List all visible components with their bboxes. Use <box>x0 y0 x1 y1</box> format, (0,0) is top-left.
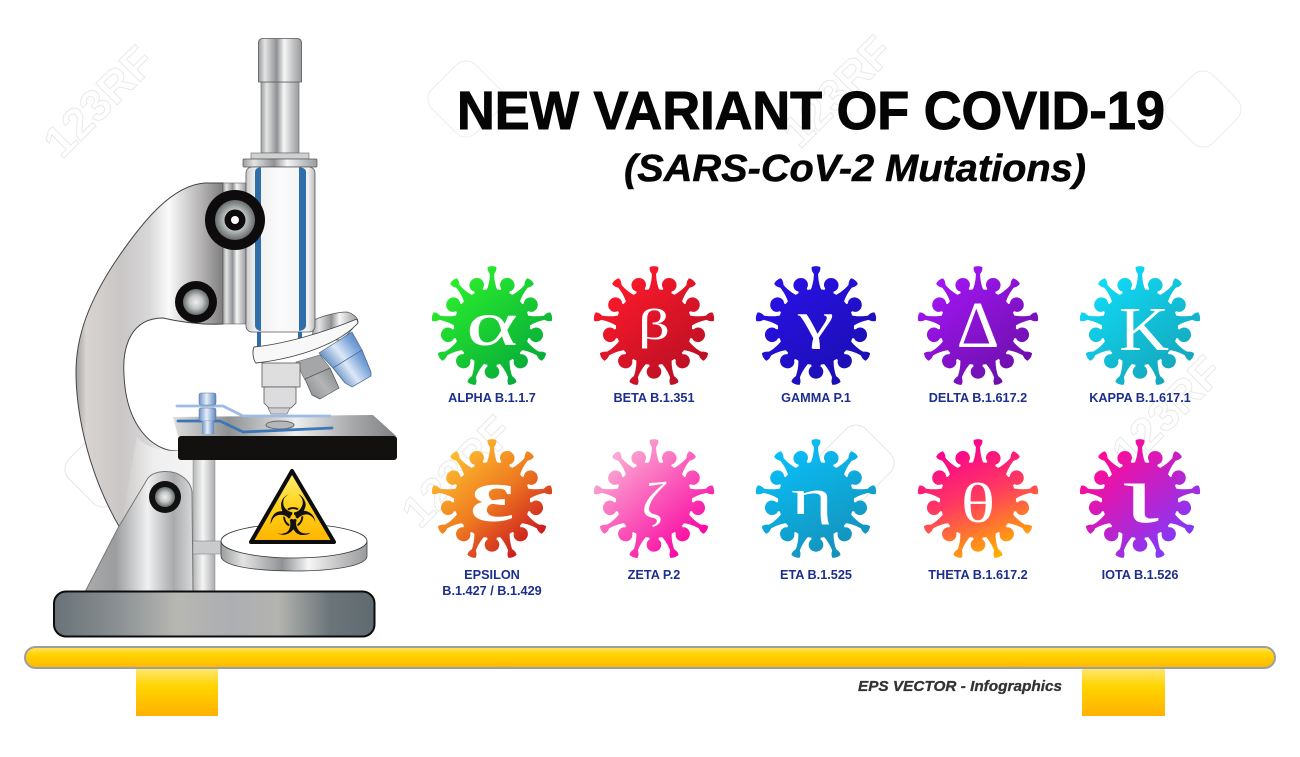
variant: zeta: ZETA P.2 <box>628 568 680 582</box>
flange <box>243 159 317 167</box>
variant: iota: ι <box>1121 448 1160 541</box>
main objective <box>262 363 300 414</box>
variant: epsilon: B.1.427 / B.1.429 <box>442 584 542 598</box>
variant: epsilon <box>432 439 552 596</box>
objective: grey <box>296 355 339 399</box>
shelf bar <box>25 647 1275 668</box>
lower tube stripes <box>257 330 302 350</box>
variant: kappa: Κ <box>1119 296 1169 364</box>
variant: gamma: GAMMA P.1 <box>781 391 851 405</box>
column <box>193 459 215 592</box>
variant: beta <box>594 266 714 402</box>
biohazard warning sign: ☣ <box>268 484 318 549</box>
specimen plate connector <box>193 541 223 554</box>
shelf foot right <box>1082 667 1165 716</box>
variant: iota <box>1080 439 1200 579</box>
base bracket <box>85 471 193 592</box>
variant: zeta: ζ <box>642 473 666 530</box>
variant: kappa: KAPPA B.1.617.1 <box>1089 391 1191 405</box>
text: 123RF <box>34 37 165 167</box>
variant: delta <box>918 266 1038 402</box>
shelf foot left <box>136 667 218 716</box>
arm post <box>223 183 246 324</box>
microscope base <box>54 592 374 636</box>
variant: delta: Δ <box>957 289 999 362</box>
body tube <box>246 167 315 332</box>
variant: beta: BETA B.1.351 <box>613 391 695 405</box>
text: 123RF <box>772 27 903 157</box>
variant: delta: DELTA B.1.617.2 <box>929 391 1027 405</box>
collar <box>251 153 309 159</box>
footer note: EPS VECTOR - Infographics <box>858 679 1062 695</box>
variant: theta: THETA B.1.617.2 <box>928 568 1028 582</box>
eyepiece cap <box>258 38 302 82</box>
eyepiece tube <box>261 82 299 153</box>
nosepiece band <box>253 319 358 363</box>
microscope <box>54 38 397 636</box>
variant: alpha <box>432 266 552 402</box>
stage clips <box>177 406 332 432</box>
text: 123RF <box>1102 347 1233 477</box>
stage block <box>178 436 397 460</box>
stage screw <box>199 393 216 434</box>
microscope arm <box>76 183 223 528</box>
stage top <box>173 415 396 436</box>
focus knob large <box>205 190 265 250</box>
variant: theta: θ <box>961 473 995 535</box>
variant: zeta <box>594 439 714 579</box>
arm neck <box>120 437 195 530</box>
hinge knob <box>149 481 181 513</box>
variant: eta <box>756 439 876 579</box>
title: NEW VARIANT OF COVID-19 <box>457 81 1165 141</box>
text: 123RF <box>392 407 523 537</box>
variant: eta: η <box>791 469 833 525</box>
nosepiece upper disk <box>312 312 358 340</box>
variant: kappa <box>1080 266 1200 402</box>
variant: alpha: ALPHA B.1.1.7 <box>448 391 536 405</box>
variant: epsilon: ε <box>470 454 514 538</box>
variant: eta: ETA B.1.525 <box>780 568 852 582</box>
variant: beta: β <box>638 302 670 349</box>
variant: alpha: α <box>466 288 518 359</box>
variant: epsilon: EPSILON <box>464 568 520 582</box>
variant: iota: IOTA B.1.526 <box>1102 568 1178 582</box>
variant: gamma <box>756 266 876 402</box>
subtitle: (SARS-CoV-2 Mutations) <box>624 148 1086 190</box>
specimen plate <box>221 524 367 571</box>
stage hole <box>266 421 294 429</box>
objective: blue <box>319 332 371 387</box>
variant: gamma: γ <box>796 293 834 350</box>
focus knob small <box>175 281 217 323</box>
biohazard warning sign <box>251 471 334 549</box>
variant: theta <box>918 439 1038 579</box>
